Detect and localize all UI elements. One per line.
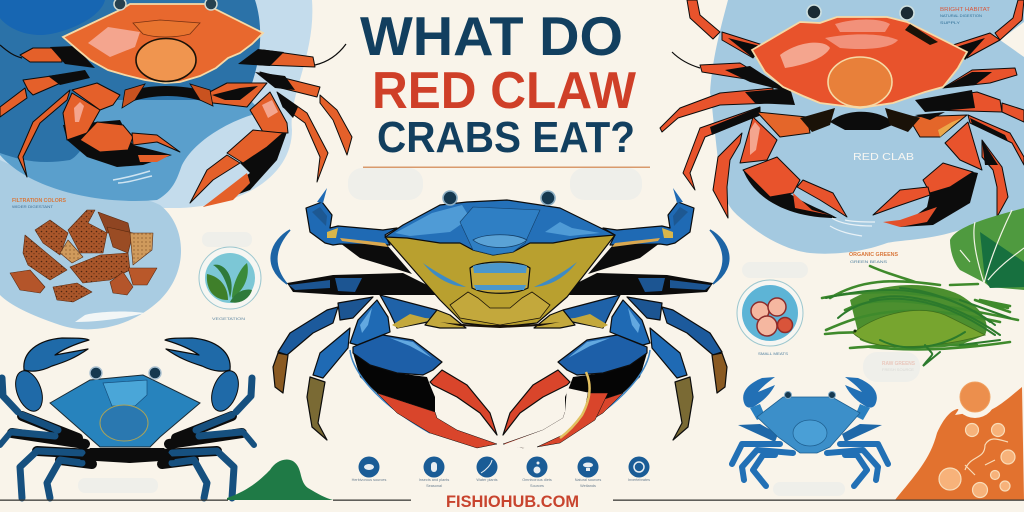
top-right small caption: BRIGHT HABITAT <box>940 7 991 13</box>
footer website: FISHIOHUB.COM <box>446 493 579 511</box>
lower body <box>80 448 175 463</box>
magnifier circle <box>954 376 996 418</box>
icon: large green leaf <box>950 208 1024 290</box>
top-right small caption: NATURAL DIGESTION <box>940 13 982 18</box>
icon 4 <box>526 456 548 478</box>
title line 3: CRABS EAT? <box>377 113 635 162</box>
right claw <box>190 83 288 207</box>
panel: top-right blue background blob <box>710 0 1024 254</box>
central plate <box>470 262 530 293</box>
icon captions: Seasonal <box>426 484 442 488</box>
crab: top-left red crab <box>0 0 352 207</box>
panel: nuts food illustration <box>10 198 157 322</box>
right claw inner gap <box>500 388 590 449</box>
icon captions: Insects and plants <box>419 478 449 482</box>
footer rules <box>0 500 1024 501</box>
fish-shaped green body <box>853 311 985 347</box>
carapace disc <box>793 420 827 446</box>
left claw <box>63 83 180 167</box>
icon 5 <box>578 456 598 478</box>
crab legs <box>660 0 1024 218</box>
right claw <box>873 112 982 227</box>
lower body <box>830 112 895 130</box>
claw <box>11 367 47 415</box>
black upper wedge <box>340 243 412 274</box>
carapace top ridge <box>133 20 200 37</box>
panel: nuts food illustration: WIDER DIGESTANT <box>12 204 54 209</box>
icon 2 <box>424 456 444 478</box>
title line 2: RED CLAW <box>372 62 637 120</box>
upper arm and pincer ball <box>306 202 397 245</box>
body lower shell <box>385 225 615 327</box>
leg: horizontal <box>287 273 447 295</box>
carapace head plate <box>103 380 147 406</box>
carapace top <box>385 200 615 255</box>
icon captions <box>352 478 650 488</box>
carapace centre disc <box>136 38 196 82</box>
right half limbs <box>503 188 729 448</box>
right claw yellow edge <box>560 372 589 438</box>
legs <box>12 416 92 464</box>
eyes <box>90 367 161 379</box>
nuts pile <box>10 210 157 302</box>
label: red crab: RED CLAB <box>853 151 914 163</box>
legs <box>738 424 778 442</box>
caption: VEGETATION <box>212 316 245 321</box>
icon: tomato circle <box>737 280 803 356</box>
icon captions: Sources <box>530 484 544 488</box>
swirl lines <box>830 218 875 236</box>
green mass <box>850 285 987 348</box>
eyes <box>443 191 555 205</box>
leg: rear segment <box>338 297 373 320</box>
water highlights <box>75 312 145 322</box>
shoulder <box>350 300 390 345</box>
carapace centre disc <box>828 57 892 107</box>
carapace highlight <box>780 43 830 68</box>
icon captions: Water plants <box>476 478 498 482</box>
title underline <box>363 166 650 168</box>
long thin arc <box>271 230 290 284</box>
crab: bottom-left blue crab <box>0 338 254 498</box>
icon captions: Wetlands <box>580 484 596 488</box>
icon captions: Omnivorous diets <box>522 478 552 482</box>
title line 1: WHAT DO <box>360 5 623 67</box>
top-right small caption: SUPPLY <box>940 20 960 25</box>
right claw lower pincer <box>537 393 608 447</box>
carapace <box>757 397 860 453</box>
carapace <box>50 375 200 447</box>
strands back <box>822 266 1018 349</box>
carapace <box>63 4 263 83</box>
crab legs <box>0 44 352 182</box>
carapace highlight <box>88 27 140 57</box>
icon 3 <box>476 456 498 478</box>
crab: bottom-right blue crab <box>732 377 888 486</box>
caption: SMALL MEATS <box>758 351 788 356</box>
title <box>360 5 650 168</box>
panel: greens food illustration: RAW GREENS <box>882 361 916 367</box>
carapace disc <box>100 405 148 441</box>
claw lower pincer <box>377 393 497 448</box>
eyes <box>114 0 217 10</box>
blue streaks <box>423 262 577 287</box>
crab: top-right red crab <box>660 0 1024 236</box>
claw upper pincer <box>430 370 497 435</box>
carapace highlight <box>395 205 470 236</box>
icon captions: Natural sources <box>575 478 601 482</box>
strands front <box>826 288 1010 366</box>
top-right small caption <box>940 7 991 25</box>
claw black body <box>353 353 435 412</box>
icon captions: Invertebrates <box>628 478 650 482</box>
icon 6 <box>628 456 650 478</box>
left claw <box>740 112 847 218</box>
placeholder pills <box>78 168 920 496</box>
eyes <box>807 5 914 20</box>
carapace <box>752 17 967 108</box>
caption: FILTRATION COLORS <box>12 198 66 204</box>
panel: greens food illustration: FRESH SOURCE <box>882 368 915 372</box>
icon row <box>352 456 650 488</box>
claw blue top <box>353 335 442 375</box>
left half limbs <box>271 188 497 448</box>
panel: orange plankton block <box>895 376 1024 500</box>
crab: central blue crab <box>271 188 729 449</box>
icon 1 <box>358 456 380 478</box>
leg: front segment <box>313 328 350 378</box>
green mound <box>227 460 333 500</box>
panel: greens food illustration: GREEN BEANS <box>850 259 887 264</box>
claw blue edge <box>350 350 430 433</box>
icon: plant circle <box>199 247 261 321</box>
plankton circles <box>966 424 978 436</box>
icon captions: Herbivorous sources <box>352 478 387 482</box>
lower body <box>125 86 210 102</box>
panel: greens food illustration <box>822 252 1018 372</box>
claw <box>750 404 765 420</box>
panel: top-left blue background blobs <box>0 0 312 329</box>
eyes <box>784 392 836 398</box>
lower body joints <box>450 292 550 325</box>
caption: ORGANIC GREENS <box>849 252 898 258</box>
